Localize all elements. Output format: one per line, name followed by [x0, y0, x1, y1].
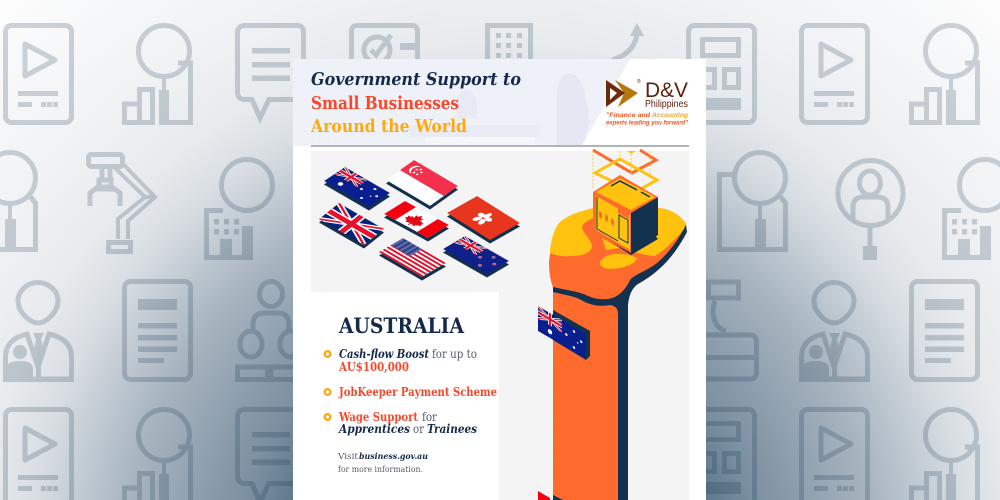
icon: speech bubble	[238, 26, 304, 118]
bullet item: wage support: Apprentices	[338, 422, 410, 436]
icon: checklist card	[352, 26, 418, 122]
logo: D&V Philippines: Accounting	[651, 112, 688, 119]
flag: Australia	[324, 167, 390, 210]
logo: D&V Philippines	[606, 78, 689, 126]
icon: magnifier person	[838, 160, 903, 260]
icon: speech bubble bottom	[238, 410, 304, 500]
icon: magnifier building right	[944, 160, 1000, 260]
title: Government Support to	[311, 69, 521, 90]
panel: infographic card	[293, 59, 706, 500]
icon: magnifier building	[206, 160, 272, 260]
flag: New Zealand	[443, 236, 509, 278]
bullet item: wage support: Wage Support	[338, 410, 418, 424]
yellow diamond frame	[595, 159, 657, 192]
bullet item: cash-flow boost: Cash-flow Boost	[339, 347, 429, 361]
hand highlight palm	[600, 254, 637, 269]
small yellow marker	[627, 151, 636, 154]
arm	[553, 285, 619, 500]
bullet item: cash-flow boost: AU$100,000	[338, 359, 409, 374]
icon: video document	[6, 26, 72, 122]
icon: search chart right	[912, 26, 978, 125]
visit note: Visit	[337, 452, 359, 462]
hand highlight thumb	[596, 208, 640, 250]
icon: video document bottom	[6, 410, 72, 500]
icon: layout document bottom	[688, 410, 754, 500]
visit note	[337, 452, 428, 475]
icon: magnifier document	[720, 152, 786, 252]
visit note: for more information.	[338, 465, 423, 475]
visit note: business.gov.au	[359, 452, 428, 462]
bullet item: cash-flow boost	[325, 347, 477, 374]
icon: magnifier document left	[0, 152, 36, 252]
bottom flag fragment	[538, 491, 563, 500]
illustration: raised hand holding a shop	[538, 150, 687, 500]
title	[310, 69, 521, 137]
heading: AUSTRALIA: AUSTRALIA	[338, 313, 465, 338]
icon: team group	[238, 282, 303, 380]
orange diamond frame	[593, 150, 656, 173]
icon: business person right	[799, 282, 870, 382]
bullet item: wage support	[325, 410, 477, 436]
icon: video document bottom right	[802, 410, 868, 500]
icon: book stack	[690, 282, 758, 379]
icon: layout document	[688, 26, 754, 122]
flags group	[319, 160, 520, 280]
title: Small Businesses	[311, 93, 459, 114]
panel: textured illustration background	[311, 151, 689, 500]
icon: business person	[3, 282, 74, 382]
icon: office block	[488, 26, 530, 116]
icon: growth arrow	[612, 23, 644, 60]
bullet item: wage support: for	[422, 410, 437, 424]
bullet item: cash-flow boost: for up to	[432, 347, 477, 361]
icon: text document	[124, 282, 190, 380]
logo: D&V Philippines: "Finance and	[606, 112, 651, 119]
flag: Canada	[384, 201, 449, 242]
icon: video document right	[802, 26, 868, 122]
bullet item: wage support: or	[413, 422, 424, 436]
arm shadow	[553, 225, 687, 500]
flag band on arm: Australia	[538, 306, 590, 360]
icon: search chart bottom	[124, 410, 190, 500]
icon: search chart bottom right	[912, 410, 978, 500]
panel: header photo background	[293, 59, 630, 146]
flag: Singapore	[386, 160, 458, 210]
hand highlight right	[630, 208, 686, 256]
title: Around the World	[310, 116, 467, 137]
flag: United Kingdom	[319, 203, 384, 248]
bullet item: wage support: Trainees	[427, 422, 477, 436]
hand highlight left	[550, 208, 596, 256]
hand	[549, 208, 686, 299]
flag: Hong Kong	[447, 196, 520, 244]
bullet item: JobKeeper: JobKeeper Payment Scheme	[338, 385, 497, 399]
icon: text document right	[912, 282, 978, 380]
flag: United States	[379, 238, 446, 280]
shop building	[593, 175, 658, 255]
icon: robot arm	[88, 154, 155, 252]
icon: search chart	[124, 26, 190, 125]
logo: D&V Philippines: ®	[637, 78, 641, 85]
logo: D&V Philippines: Philippines	[645, 99, 688, 110]
bullet list: support schemes	[325, 347, 497, 436]
logo: D&V Philippines: D&V	[645, 79, 688, 102]
divider line	[311, 145, 689, 147]
dashed guides	[593, 151, 650, 190]
logo: D&V Philippines: experts leading you forward"	[606, 120, 689, 126]
